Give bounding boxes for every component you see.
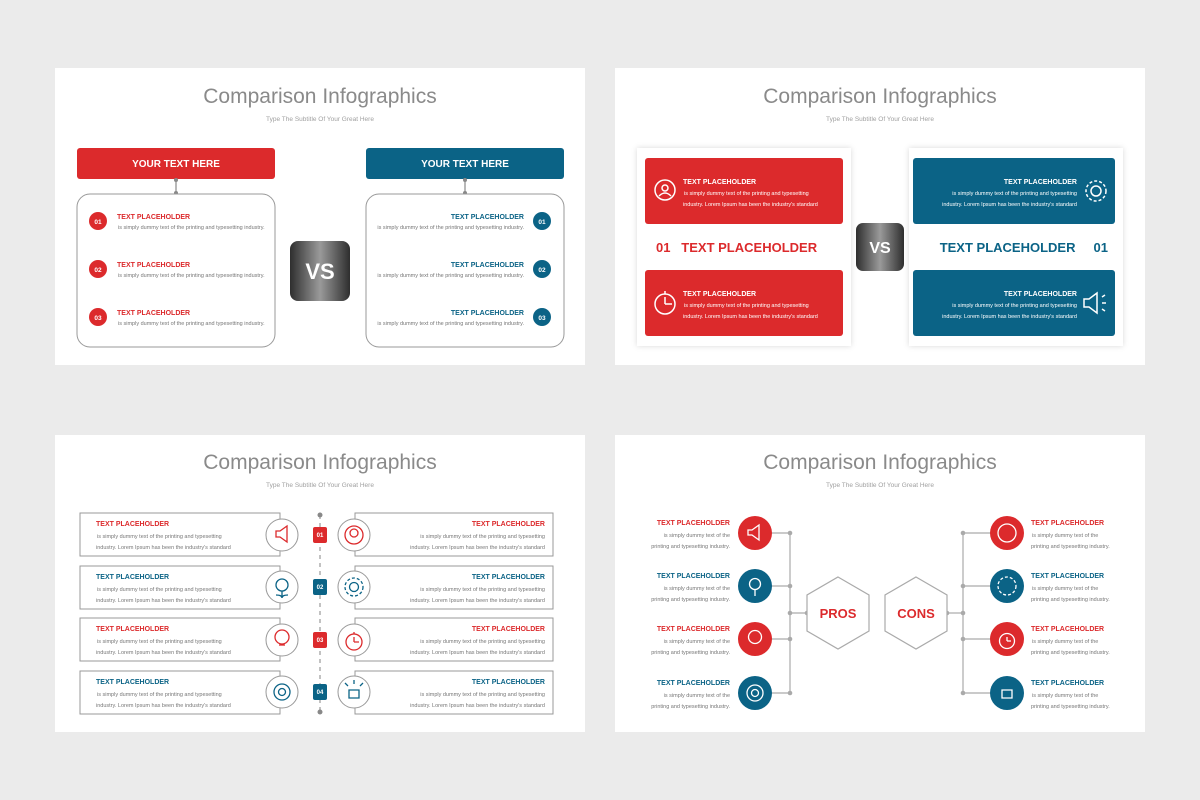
VS badge 2 [856,223,904,271]
left texts: industry. Lorem Ipsum has been the industry's standard [96,650,231,656]
right list box: TEXT PLACEHOLDER [451,310,524,317]
hex CONS: CONS [897,606,935,621]
left list box: 03 [94,315,102,322]
circles [738,516,1024,710]
blue card bottom: is simply dummy text of the printing and typesetting [952,303,1077,309]
right texts 4: TEXT PLACEHOLDER [1031,626,1104,633]
hex CONS [885,577,947,649]
left texts: is simply dummy text of the printing and typesetting [97,692,222,698]
red header [77,148,275,179]
right texts 4: is simply dummy text of the [1032,693,1098,699]
blue card bottom [913,270,1115,336]
right texts 4: TEXT PLACEHOLDER [1031,520,1104,527]
blue card top: TEXT PLACEHOLDER [1004,179,1077,186]
right texts: TEXT PLACEHOLDER [472,626,545,633]
left texts 4: printing and typesetting industry. [651,650,730,656]
left texts: is simply dummy text of the printing and typesetting [97,587,222,593]
panel: slide 1 [55,68,585,365]
number tags: 02 [317,585,324,591]
left list box: 01 [94,219,102,226]
blue middle label: TEXT PLACEHOLDER 01 [940,240,1108,255]
left texts 4: TEXT PLACEHOLDER [657,680,730,687]
hex PROS [807,577,869,649]
title 2: Comparison Infographics [763,85,997,108]
left list box: is simply dummy text of the printing and typesetting industry. [118,273,265,279]
red middle label: 01 TEXT PLACEHOLDER [656,240,818,255]
right texts: TEXT PLACEHOLDER [472,574,545,581]
blue card bottom: industry. Lorem Ipsum has been the industry's standard [942,314,1077,320]
right texts 4: is simply dummy text of the [1032,586,1098,592]
left list box [77,194,275,347]
left texts: TEXT PLACEHOLDER [96,521,169,528]
panel: slide 4 [615,435,1145,732]
left texts 4: printing and typesetting industry. [651,544,730,550]
left texts [96,521,231,709]
blue header: YOUR TEXT HERE [421,159,509,170]
number tags: 04 [317,690,324,696]
subtitle 4: Type The Subtitle Of Your Great Here [826,482,934,489]
red card top: is simply dummy text of the printing and typesetting [684,191,809,197]
blue card top: industry. Lorem Ipsum has been the industry's standard [942,202,1077,208]
red card bottom [645,270,843,336]
left list box: is simply dummy text of the printing and typesetting industry. [118,321,265,327]
red card bottom: TEXT PLACEHOLDER [683,291,756,298]
right texts 4 [1031,520,1110,710]
left texts 4: printing and typesetting industry. [651,704,730,710]
left texts 4: is simply dummy text of the [664,533,730,539]
right texts 4: is simply dummy text of the [1032,639,1098,645]
VS badge 2: VS [869,240,891,257]
VS badge 1: VS [305,259,335,284]
icons slide 3 [274,526,363,700]
left texts 4: printing and typesetting industry. [651,597,730,603]
right list box: is simply dummy text of the printing and typesetting industry. [377,225,524,231]
connectors [755,533,1007,693]
left texts: TEXT PLACEHOLDER [96,626,169,633]
subtitle 3: Type The Subtitle Of Your Great Here [266,482,374,489]
right texts: industry. Lorem Ipsum has been the industry's standard [410,650,545,656]
red card top: TEXT PLACEHOLDER [683,179,756,186]
right list box: 01 [538,219,546,226]
left list box: TEXT PLACEHOLDER [117,214,190,221]
right texts 4: printing and typesetting industry. [1031,544,1110,550]
title 3: Comparison Infographics [203,451,437,474]
right list box [366,194,564,347]
subtitle 1: Type The Subtitle Of Your Great Here [266,116,374,123]
hex PROS: PROS [820,606,857,621]
VS badge 1 [290,241,350,301]
right texts: industry. Lorem Ipsum has been the industry's standard [410,545,545,551]
right texts [410,521,545,709]
left texts 4: TEXT PLACEHOLDER [657,573,730,580]
title 1: Comparison Infographics [203,85,437,108]
left texts 4: TEXT PLACEHOLDER [657,520,730,527]
red card top: industry. Lorem Ipsum has been the industry's standard [683,202,818,208]
right texts: industry. Lorem Ipsum has been the industry's standard [410,598,545,604]
panel: slide 2 [615,68,1145,365]
left list box: TEXT PLACEHOLDER [117,310,190,317]
title 4: Comparison Infographics [763,451,997,474]
right texts: industry. Lorem Ipsum has been the industry's standard [410,703,545,709]
right texts 4: printing and typesetting industry. [1031,704,1110,710]
right texts 4: printing and typesetting industry. [1031,650,1110,656]
red card bottom: industry. Lorem Ipsum has been the industry's standard [683,314,818,320]
left texts 4 [651,520,730,710]
left texts 4: is simply dummy text of the [664,586,730,592]
right texts 4: printing and typesetting industry. [1031,597,1110,603]
right list box: 02 [538,267,546,274]
right list box: TEXT PLACEHOLDER [451,214,524,221]
blue card top: is simply dummy text of the printing and typesetting [952,191,1077,197]
right texts 4: is simply dummy text of the [1032,533,1098,539]
left texts 4: TEXT PLACEHOLDER [657,626,730,633]
blue card bottom: TEXT PLACEHOLDER [1004,291,1077,298]
right list box: TEXT PLACEHOLDER [451,262,524,269]
right texts: is simply dummy text of the printing and typesetting [420,692,545,698]
right list box: is simply dummy text of the printing and typesetting industry. [377,273,524,279]
left list box: TEXT PLACEHOLDER [117,262,190,269]
right texts 4: TEXT PLACEHOLDER [1031,680,1104,687]
left texts: TEXT PLACEHOLDER [96,679,169,686]
red card top [645,158,843,224]
right texts: TEXT PLACEHOLDER [472,679,545,686]
left texts: TEXT PLACEHOLDER [96,574,169,581]
left texts: industry. Lorem Ipsum has been the industry's standard [96,598,231,604]
left texts: industry. Lorem Ipsum has been the industry's standard [96,545,231,551]
blue card top [913,158,1115,224]
left texts: industry. Lorem Ipsum has been the industry's standard [96,703,231,709]
right texts: is simply dummy text of the printing and typesetting [420,639,545,645]
right list box: 03 [538,315,546,322]
left list box: 02 [94,267,102,274]
right texts: is simply dummy text of the printing and typesetting [420,587,545,593]
subtitle 2: Type The Subtitle Of Your Great Here [826,116,934,123]
right texts: is simply dummy text of the printing and typesetting [420,534,545,540]
red card bottom: is simply dummy text of the printing and typesetting [684,303,809,309]
number tags: 03 [317,638,324,644]
left texts: is simply dummy text of the printing and typesetting [97,534,222,540]
left list box: is simply dummy text of the printing and typesetting industry. [118,225,265,231]
right texts 4: TEXT PLACEHOLDER [1031,573,1104,580]
right list box: is simply dummy text of the printing and typesetting industry. [377,321,524,327]
left texts 4: is simply dummy text of the [664,693,730,699]
number tags: 01 [317,533,324,539]
right texts: TEXT PLACEHOLDER [472,521,545,528]
number tags [313,527,327,700]
panel: slide 3 [55,435,585,732]
blue header [366,148,564,179]
red header: YOUR TEXT HERE [132,159,220,170]
left texts 4: is simply dummy text of the [664,639,730,645]
left texts: is simply dummy text of the printing and typesetting [97,639,222,645]
